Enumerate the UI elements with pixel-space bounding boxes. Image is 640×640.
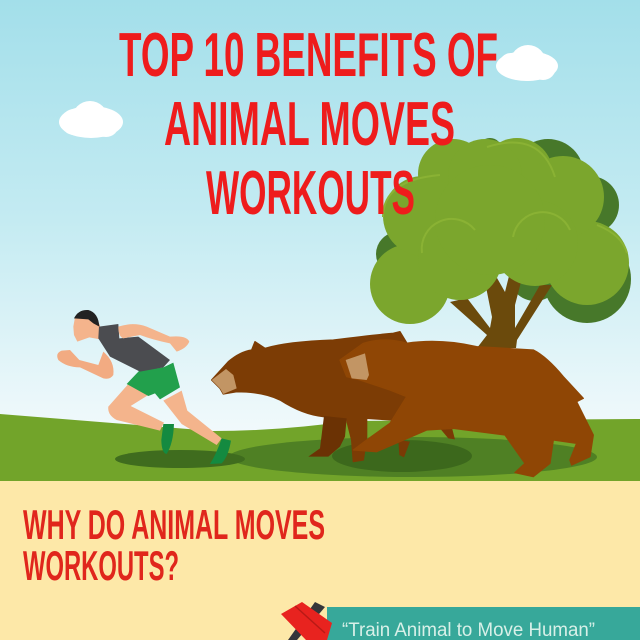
ground shadow: runner: [115, 450, 245, 468]
runner shoes: [161, 424, 231, 464]
icon: dumbbell: [281, 602, 332, 640]
runner legs: [108, 384, 222, 445]
tree foliage front: [370, 138, 629, 324]
sky background: [0, 0, 640, 440]
section heading: WHY DO ANIMAL MOVES: [23, 501, 325, 548]
title: [119, 21, 498, 228]
ground hill: [0, 414, 640, 482]
back bear far leg: [308, 416, 347, 457]
runner neck and head: [73, 316, 100, 342]
back bear far paws: [398, 427, 455, 457]
ground shadow: front bear: [332, 440, 472, 472]
quote banner: [327, 607, 640, 640]
back bear snout: [212, 369, 237, 394]
front bear snout: [346, 353, 369, 380]
title: WORKOUTS: [206, 159, 415, 228]
runner back arm: [57, 350, 114, 379]
front bear: [340, 340, 593, 477]
runner shirt: [98, 324, 170, 372]
cloud: left: [59, 101, 123, 138]
back bear: [212, 332, 433, 462]
ground shadow: bears: [229, 437, 597, 477]
cloud: right: [496, 45, 558, 81]
bears: [212, 332, 593, 477]
tree: [370, 138, 631, 348]
runner: [57, 310, 231, 464]
cream lower panel: [0, 481, 640, 640]
runner shorts: [127, 363, 180, 399]
runner hair: [74, 310, 99, 327]
title: ANIMAL MOVES: [164, 90, 455, 159]
section heading: WORKOUTS?: [23, 542, 179, 589]
tree foliage highlights: [383, 142, 627, 253]
runner front arm: [118, 324, 189, 352]
section heading: [23, 501, 325, 589]
tree foliage back: [376, 138, 631, 323]
tree trunk: [450, 272, 552, 348]
